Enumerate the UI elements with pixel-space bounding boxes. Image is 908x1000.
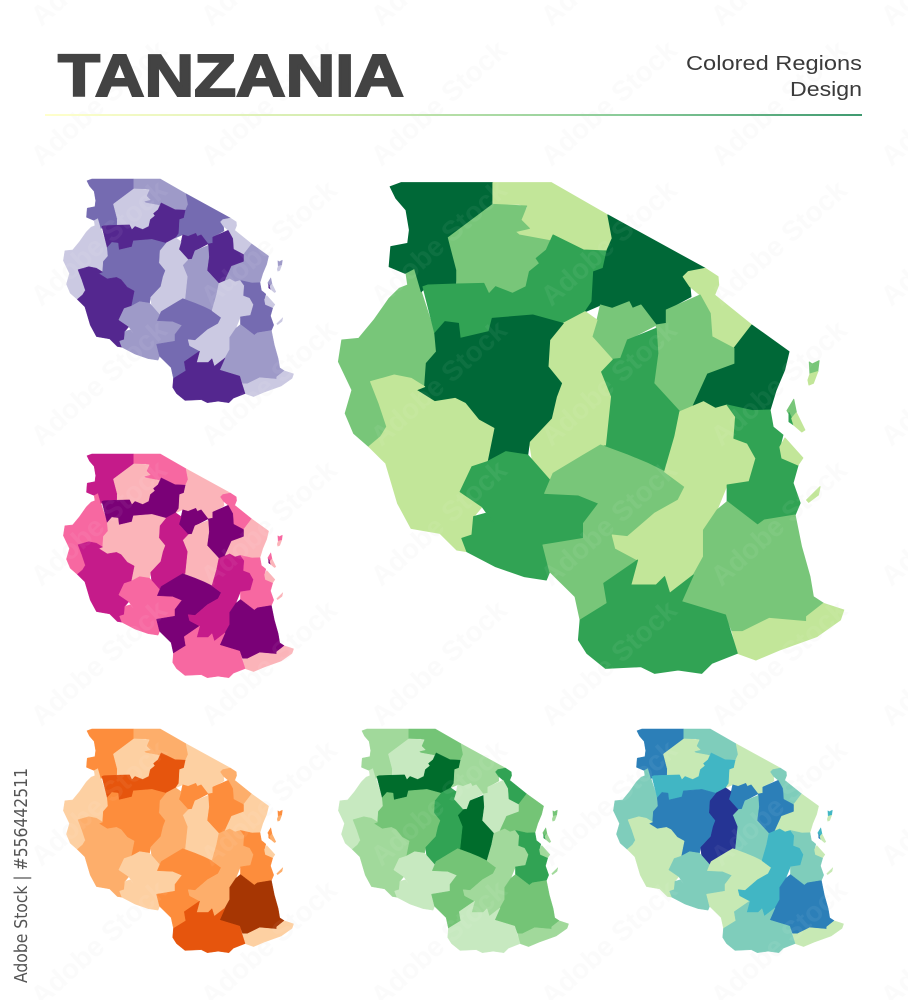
subtitle: Design xyxy=(790,79,862,101)
title: TANZANIA xyxy=(58,43,404,109)
map: large green xyxy=(338,183,844,673)
subtitle: Colored Regions xyxy=(686,53,862,75)
subtitle xyxy=(686,53,862,101)
map: purple xyxy=(63,179,294,403)
map: pink xyxy=(63,454,294,678)
map: blue xyxy=(613,729,844,953)
map: small green xyxy=(338,729,569,953)
stock id label: Adobe Stock | #556442511 xyxy=(11,768,32,983)
map: orange xyxy=(63,729,294,953)
